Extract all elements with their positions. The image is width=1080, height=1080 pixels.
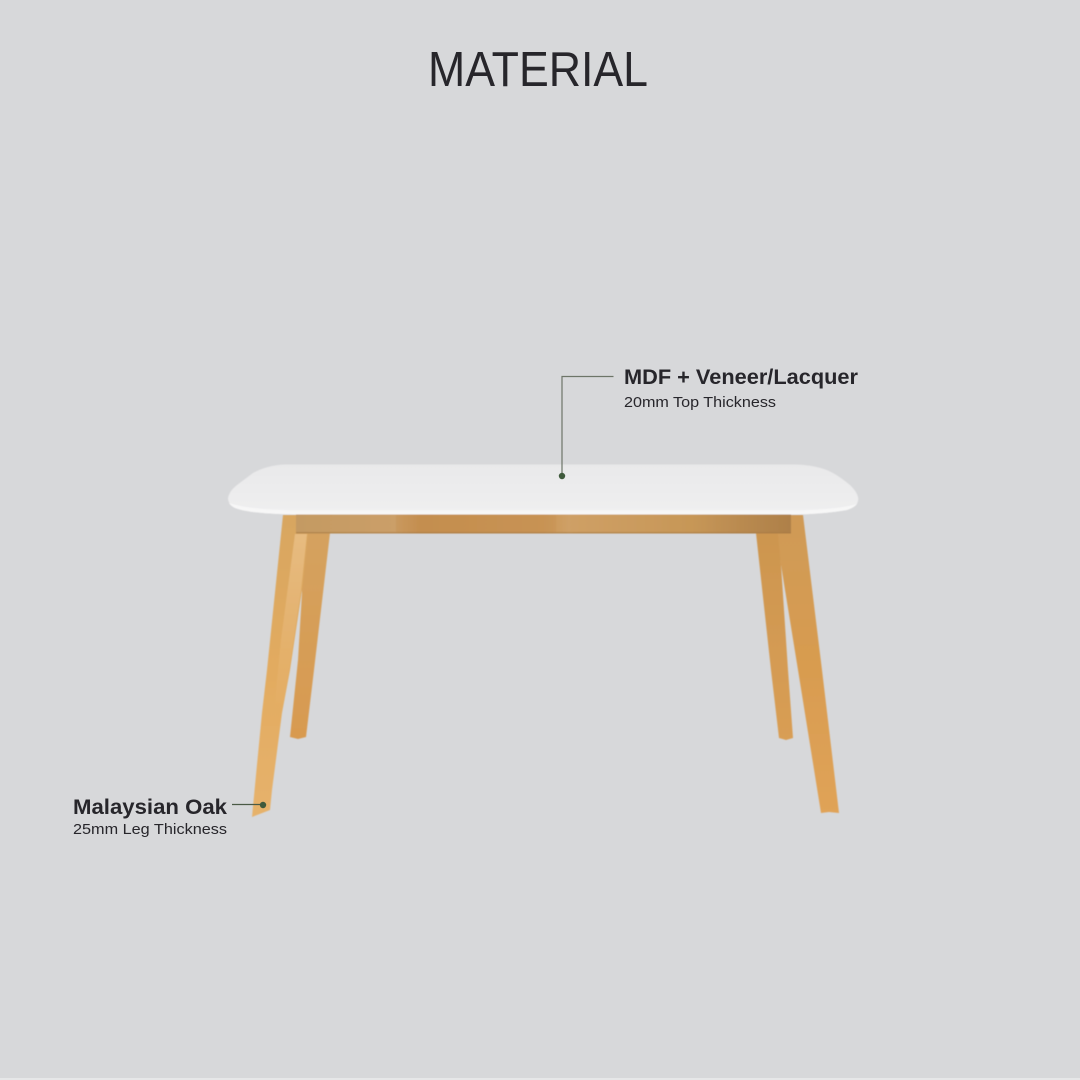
- callout: leg material: [73, 796, 266, 838]
- rear left leg: [290, 533, 330, 739]
- leg highlights: [274, 534, 307, 713]
- subheading: 20mm Top Thickness: [624, 394, 776, 411]
- table illustration: [228, 464, 858, 817]
- callout: table top material: [559, 366, 858, 479]
- subheading: 25mm Leg Thickness: [73, 821, 227, 838]
- title: MATERIAL: [428, 42, 648, 97]
- front left leg: [252, 515, 308, 817]
- rear right leg: [756, 533, 793, 740]
- apron rail: [296, 514, 791, 534]
- dot: [260, 802, 266, 808]
- front right leg: [778, 515, 839, 813]
- heading: MDF + Veneer/Lacquer: [624, 366, 858, 389]
- leader line: [562, 376, 614, 476]
- table top: [228, 464, 858, 514]
- heading: Malaysian Oak: [73, 796, 227, 819]
- dot: [559, 473, 565, 479]
- leader line: [232, 804, 263, 806]
